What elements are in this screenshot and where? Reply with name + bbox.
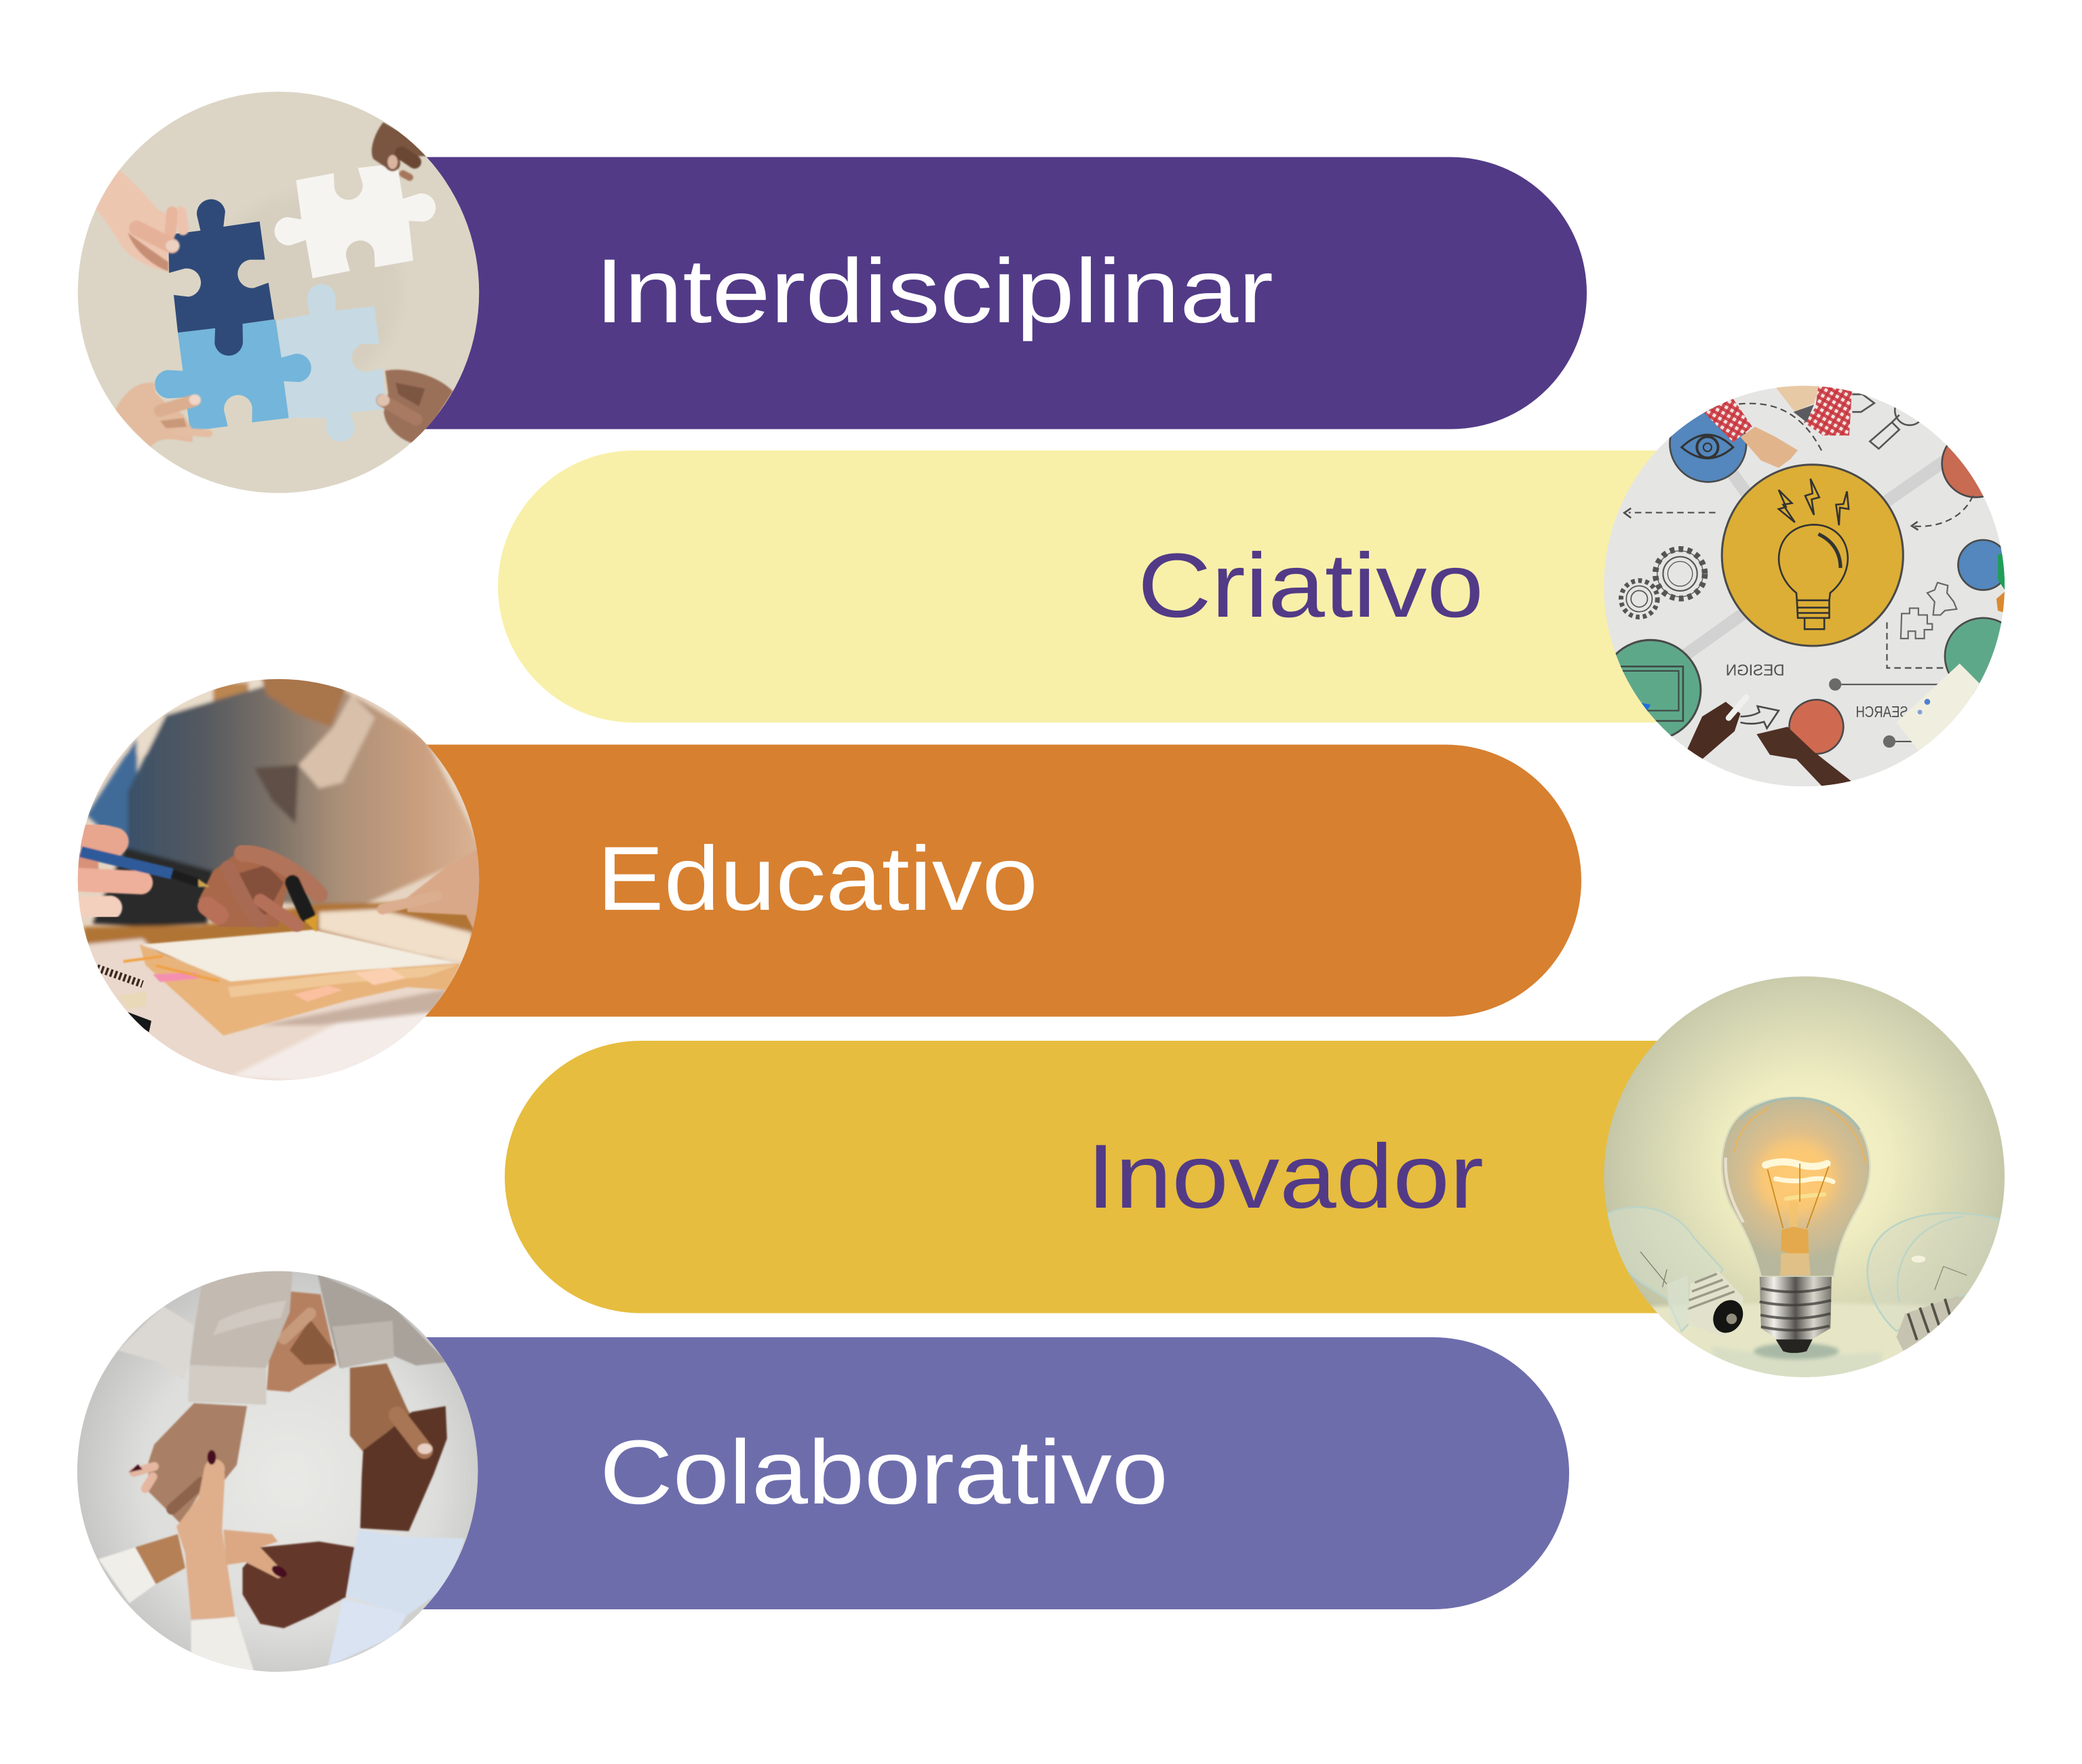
puzzle sketches [1901,583,1956,638]
hand: bottom right [377,370,453,444]
line markers [1829,678,1940,748]
hands and sleeves top [1703,385,1852,468]
bar: Inovador [505,1041,1832,1314]
spiral notebook and marker [97,968,151,1032]
hand: top left [96,168,183,271]
magnifier sketch [1852,394,1925,448]
dark hands bottom [1687,697,1855,787]
filament [1765,1162,1833,1228]
puzzle piece: light blue [155,320,311,432]
label: Educativo: Educativo [597,828,1038,929]
puzzle piece: white [275,164,436,278]
grey connecting bands [1682,457,1949,657]
left unlit bulb [1608,1207,1749,1339]
bar: Colaborativo [204,1337,1569,1609]
writing hand and pen [198,854,319,932]
label: Criativo: Criativo [1138,535,1484,636]
label: Interdisciplinar: Interdisciplinar [595,241,1273,342]
white sleeve bottom [191,1617,254,1672]
notebook paper [1896,664,1980,750]
dark lap area [92,847,213,927]
green circle right [1944,617,2001,694]
top-right cuff [332,1321,394,1368]
glass stem [1781,1227,1809,1254]
green circle left with screen [1615,639,1701,737]
blue circle right [1958,540,2008,590]
right hand [383,847,481,929]
main book [123,929,460,1035]
red circle bottom [1789,699,1843,754]
shadow of central bulb [1754,1343,1839,1360]
table [83,903,481,959]
red circle top right [1941,445,1984,498]
right unlit bulb [1868,1213,2005,1355]
arrow sketch [1741,706,1779,728]
mirrored word: SEARCH: SEARCH [1856,703,1908,721]
top hand [267,1291,336,1392]
blue sleeve on the left [87,738,136,854]
central yellow circle with light bulb [1722,465,1903,646]
photo circle: four linked hands [54,1262,516,1723]
lower-right dark hand [243,1541,354,1628]
woman's forearm and thumb [176,1450,235,1619]
collar [298,694,375,788]
central glass bulb [1722,1097,1870,1277]
photo circle: creative design sketches [1604,385,2005,786]
top-left grey sleeve [117,1306,194,1379]
puzzle piece: navy [168,199,274,356]
bar: Criativo [498,450,1832,723]
blue eye circle [1670,406,1746,482]
light-blue sleeve [328,1530,465,1666]
top-center sleeve [188,1271,292,1404]
marker at right edge [1997,552,2007,613]
gears [1621,549,1705,617]
photo circle: puzzle pieces held by hands [77,92,479,493]
neck [261,674,351,727]
photo circle: glowing light bulb [1587,963,2049,1425]
dashed arrows [1629,404,1973,668]
left hand [149,1403,247,1524]
mirrored word: DESIGN: DESIGN [1726,661,1785,678]
woman's arm and sleeve at lower left [98,1534,185,1603]
label: Colaborativo: Colaborativo [600,1422,1168,1523]
label: Inovador: Inovador [1087,1126,1484,1227]
metal screw base [1760,1277,1832,1353]
hand: top right [372,122,428,177]
photo circle: student writing in a book [54,665,516,1126]
right open book [319,909,472,962]
hand: bottom left [115,383,209,447]
lower papers [83,938,472,1086]
left fingers and blue pen [75,832,210,909]
background wood and window [113,676,349,753]
top-right sleeve [317,1273,447,1368]
floor [1587,1303,2029,1405]
dark fist right [360,1406,447,1531]
bar: Interdisciplinar [204,157,1587,429]
woman's fingers [223,1530,289,1579]
shirt [128,685,481,906]
puzzle piece: pale blue [276,284,386,442]
bar: Educativo [204,745,1581,1016]
filament glow [1756,1141,1836,1215]
right upper arm [350,1364,432,1459]
sticky notes [153,972,199,982]
